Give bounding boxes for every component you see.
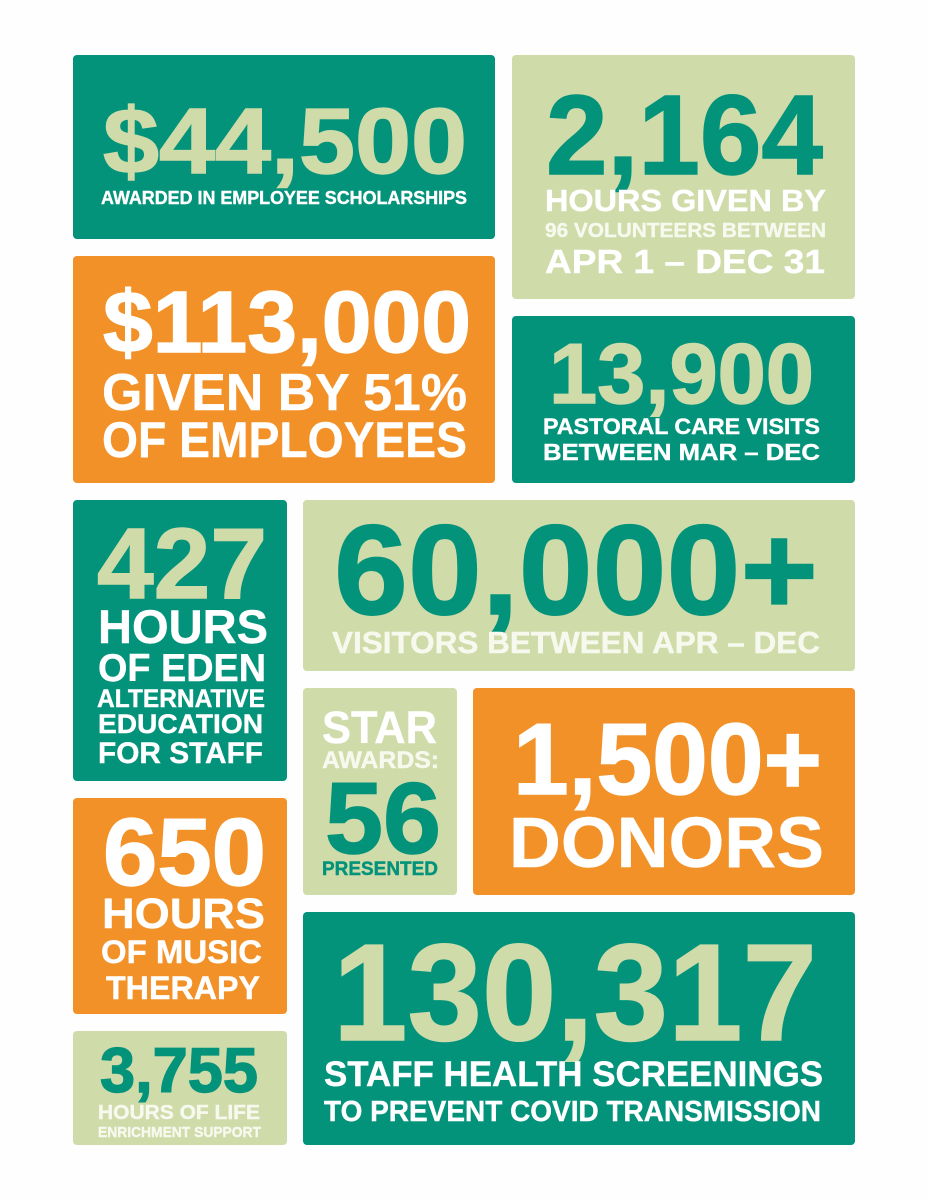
- caption: visitors between apr to dec: VISITORS BETWEEN APR – DEC: [332, 625, 820, 660]
- panel: donors: [473, 688, 855, 895]
- panel: star awards: [303, 688, 457, 895]
- caption: enrichment support: ENRICHMENT SUPPORT: [98, 1124, 261, 1141]
- caption: donors: DONORS: [509, 804, 824, 883]
- stat: 2,164: 2,164: [546, 72, 823, 198]
- stat: 427: 427: [97, 508, 267, 620]
- panel: volunteer hours: [512, 55, 855, 299]
- caption: of eden: OF EDEN: [98, 647, 266, 690]
- panel: scholarships: [73, 55, 495, 239]
- stat: 56: 56: [325, 763, 441, 875]
- panel: staff health screenings: [303, 912, 855, 1145]
- stat: $113,000: $113,000: [103, 274, 471, 371]
- caption: 96 volunteers between: 96 VOLUNTEERS BETWEEN: [545, 219, 826, 242]
- caption: hours: HOURS: [102, 890, 265, 938]
- caption: date range: APR 1 – DEC 31: [545, 243, 825, 280]
- stat: 13,900: 13,900: [549, 327, 814, 422]
- stat: 1,500+: 1,500+: [513, 704, 822, 816]
- stat: $44,500: $44,500: [103, 89, 467, 193]
- panel: pastoral care: [512, 316, 855, 483]
- caption: awards: AWARDS:: [322, 747, 439, 774]
- panel: life enrichment: [73, 1031, 287, 1145]
- caption: of employees: OF EMPLOYEES: [102, 412, 467, 468]
- caption: staff health screenings: STAFF HEALTH SCREENINGS: [324, 1055, 823, 1094]
- panel: visitors: [303, 499, 855, 671]
- caption: education: EDUCATION: [98, 709, 263, 739]
- stat: 650: 650: [103, 799, 266, 906]
- panel: eden alternative education: [73, 500, 287, 781]
- caption: star: STAR: [322, 702, 437, 753]
- caption: hours: HOURS: [98, 600, 268, 653]
- caption: pastoral care visits: PASTORAL CARE VISITS: [543, 414, 820, 439]
- caption: therapy: THERAPY: [106, 970, 260, 1006]
- caption: hours given by: HOURS GIVEN BY: [545, 183, 826, 218]
- caption: of music: OF MUSIC: [101, 934, 262, 970]
- caption: alternative: ALTERNATIVE: [97, 685, 265, 713]
- caption: given by 51%: GIVEN BY 51%: [102, 364, 467, 422]
- caption: awarded in employee scholarships: AWARDED IN EMPLOYEE SCHOLARSHIPS: [101, 187, 467, 208]
- panel: music therapy: [73, 798, 287, 1014]
- caption: between mar to dec: BETWEEN MAR – DEC: [543, 439, 820, 465]
- panel: employee giving: [73, 256, 495, 483]
- stat: 60,000+: 60,000+: [334, 499, 818, 642]
- caption: to prevent covid transmission: TO PREVENT COVID TRANSMISSION: [324, 1096, 821, 1128]
- caption: presented: PRESENTED: [322, 859, 438, 880]
- caption: hours of life: HOURS OF LIFE: [98, 1102, 260, 1124]
- caption: for staff: FOR STAFF: [98, 737, 263, 770]
- stat: 3,755: 3,755: [100, 1036, 258, 1106]
- stat: 130,317: 130,317: [333, 916, 817, 1070]
